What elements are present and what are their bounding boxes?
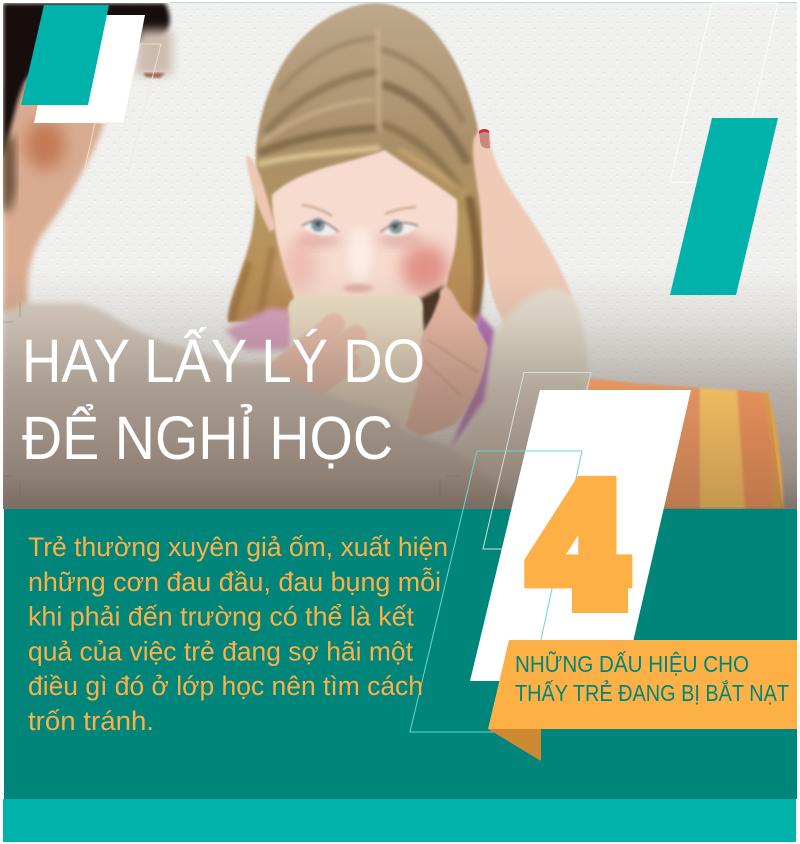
bottom bright teal band (3, 799, 796, 842)
top-left teal parallelogram (21, 5, 109, 105)
dark gradient at photo bottom (3, 270, 797, 509)
ribbon fold (488, 729, 541, 761)
body text: khi phải đến trường có thể là kết (28, 602, 414, 632)
mug (288, 296, 423, 428)
wall background (3, 3, 797, 509)
sweater of the girl (225, 308, 292, 350)
fingernail (479, 129, 490, 148)
grey outline behind number card (483, 372, 591, 549)
orange ribbon with subtitle (488, 640, 797, 729)
top-left white parallelogram (34, 15, 145, 123)
teal outline over number card (410, 451, 582, 732)
title (22, 327, 425, 472)
adult head, blurred (3, 3, 172, 312)
adult sleeve right (458, 287, 588, 496)
ribbon text line 1: NHỮNG DẤU HIỆU CHO (515, 650, 749, 677)
top hairline (170, 2, 797, 3)
body text: điều gì đó ở lớp học nên tìm cách (28, 671, 423, 701)
teal content panel (4, 509, 797, 799)
hands on mug (262, 287, 488, 437)
body text: trốn tránh. (28, 706, 154, 736)
body text: những cơn đau đầu, đau bụng mỗi (28, 566, 441, 597)
eyes (302, 205, 418, 236)
crop marks (3, 302, 460, 497)
body text: Trẻ thường xuyên giả ốm, xuất hiện (28, 532, 448, 562)
left ear (246, 155, 276, 232)
body text: quả của việc trẻ đang sợ hãi một (28, 636, 413, 666)
top-left thin outline (84, 44, 161, 172)
photo: child drinking from a mug with adult beside her (3, 3, 797, 509)
girl hair (228, 3, 484, 325)
top-right teal parallelogram (670, 118, 778, 295)
body text (28, 532, 448, 736)
top-right thin outline (670, 3, 778, 182)
title: ĐỂ NGHỈ HỌC (22, 404, 393, 472)
big number 4: 4 (530, 445, 625, 642)
white number card (470, 390, 691, 681)
girl face (272, 150, 458, 300)
adult shoulder foreground (3, 300, 460, 508)
pillow (588, 378, 783, 509)
dark gap beside mug (418, 285, 445, 335)
title: HAY LẤY LÝ DO (22, 327, 425, 395)
adult hand on girl's head (473, 131, 572, 325)
